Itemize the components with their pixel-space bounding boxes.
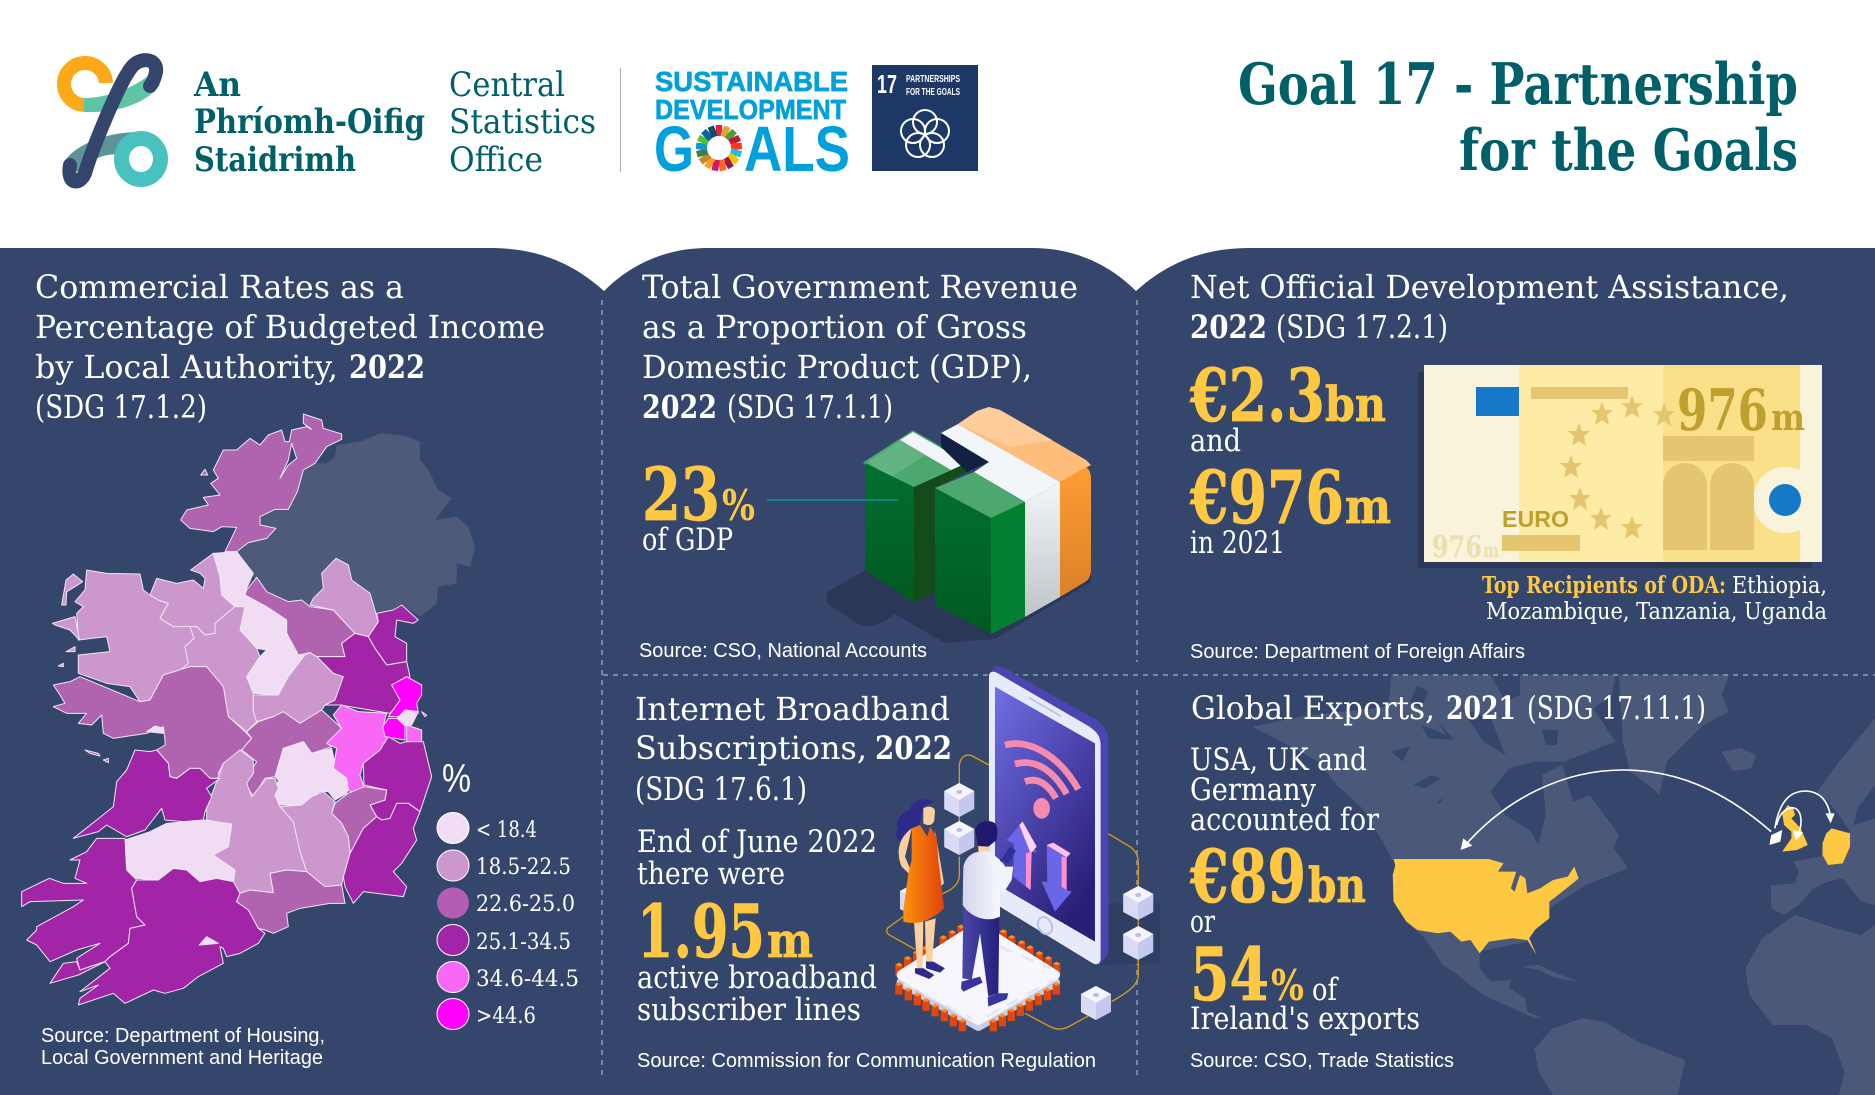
- panel: commercial rates heading: 2022: [349, 348, 425, 386]
- Northern Ireland: [237, 433, 475, 617]
- SDG wordmark: ALS: [744, 113, 850, 185]
- exports stats: bn: [1308, 858, 1366, 914]
- icon: euro banknote: m: [1483, 538, 1499, 562]
- source: communication regulation: Source: Commission for Communication Regulation: [637, 1050, 1096, 1072]
- exports stats: or: [1190, 904, 1215, 940]
- legend item: 25.1-34.5: 25.1-34.5: [476, 930, 571, 955]
- panel: commercial rates heading: Commercial Rates as a: [35, 268, 404, 306]
- panel: government revenue heading: Total Government Revenue: [642, 268, 1078, 306]
- SDG wordmark: G: [654, 113, 694, 185]
- exports stats: USA, UK and: [1190, 742, 1367, 778]
- Irish name of office: Staidrimh: [194, 140, 356, 180]
- panel: commercial rates heading: Percentage of Budgeted Income: [35, 308, 545, 346]
- woman figure: [896, 799, 945, 979]
- SDG wordmark: [654, 66, 850, 185]
- panel: development assistance heading: Net Official Development Assistance,: [1190, 268, 1789, 306]
- panel: global exports heading: (SDG 17.11.1): [1527, 689, 1706, 727]
- ODA stats: [1189, 353, 1391, 561]
- 23% of GDP stat: %: [722, 481, 755, 530]
- panel: broadband heading: 2022: [875, 729, 952, 767]
- exports stats: [1189, 742, 1420, 1037]
- English name of office: Office: [449, 140, 543, 180]
- legend item: above 44.6: [437, 998, 536, 1030]
- exports stats: Germany: [1190, 772, 1316, 808]
- SDG wordmark: DEVELOPMENT: [655, 94, 846, 125]
- broadband stat: [637, 824, 877, 1028]
- Irish name of office: Phríomh-Oifig: [194, 102, 425, 142]
- phone: [989, 666, 1108, 965]
- cube nodes: [900, 783, 1153, 1020]
- panel: government revenue heading: 2022: [642, 388, 717, 426]
- broadband stat: subscriber lines: [637, 992, 861, 1028]
- export destinations map: [1393, 770, 1850, 955]
- Irish name of office: An: [193, 65, 241, 105]
- panel background: [0, 248, 1875, 1095]
- data arrows: [1007, 822, 1072, 912]
- panel: global exports heading: Global Exports,: [1191, 689, 1435, 727]
- source: national accounts: Source: CSO, National Accounts: [639, 640, 927, 662]
- broadband stat: active broadband: [637, 960, 877, 996]
- panel: commercial rates heading: [35, 268, 545, 426]
- English name of office: Statistics: [449, 102, 596, 142]
- UK: [1782, 805, 1808, 852]
- panel: development assistance heading: (SDG 17.2.1): [1276, 308, 1448, 346]
- icon: euro banknote: EURO: [1502, 506, 1569, 532]
- Germany: [1823, 828, 1850, 865]
- SDG wordmark: SUSTAINABLE: [655, 66, 848, 97]
- top recipients note: Ethiopia,: [1732, 573, 1827, 599]
- USA: [1393, 859, 1579, 955]
- broadband stat: End of June 2022: [637, 824, 877, 860]
- panel: commercial rates heading: (SDG 17.1.2): [35, 388, 207, 426]
- soft shadow: [1100, 903, 1160, 965]
- SDG 17 icon: [872, 65, 978, 171]
- panel: development assistance heading: [1190, 268, 1789, 346]
- connector line: [767, 499, 898, 501]
- chip platform: [895, 925, 1060, 1031]
- icon: Irish flag 3D blocks: [826, 407, 1091, 643]
- source: housing: [41, 1025, 325, 1069]
- icon: euro banknote: 976: [1677, 377, 1768, 444]
- SDG 17 icon: PARTNERSHIPS: [906, 74, 960, 85]
- exports stats: of: [1312, 972, 1339, 1008]
- header background: [0, 0, 1875, 248]
- source: housing: Source: Department of Housing,: [41, 1025, 325, 1047]
- exports stats: %: [1271, 961, 1304, 1010]
- English name of office: [449, 65, 596, 180]
- 23% of GDP stat: of GDP: [642, 522, 733, 558]
- CSO logo: [64, 60, 160, 181]
- panel: development assistance heading: 2022: [1190, 308, 1267, 346]
- ODA stats: €976: [1189, 455, 1344, 541]
- main title: [1238, 51, 1798, 184]
- top recipients note: Top Recipients of ODA:: [1482, 572, 1726, 599]
- map legend: [437, 757, 579, 1030]
- 23% of GDP stat: 23: [642, 452, 720, 538]
- broadband stat: 1.95: [637, 889, 765, 975]
- exports stats: accounted for: [1190, 802, 1379, 838]
- ODA stats: €2.3: [1189, 353, 1325, 439]
- circuit wires: [887, 755, 1138, 1029]
- Ireland: [1769, 830, 1782, 845]
- panel: broadband heading: [635, 690, 952, 808]
- icon: euro banknote: 976: [1432, 530, 1482, 565]
- county regions: [22, 414, 432, 1005]
- world map background: [1253, 675, 1875, 1095]
- exports stats: 54: [1190, 932, 1269, 1018]
- man figure: [961, 821, 1016, 1007]
- wifi symbol: [1005, 744, 1078, 819]
- SDG 17 icon: 17: [877, 69, 897, 99]
- ODA stats: m: [1345, 479, 1391, 535]
- ODA stats: and: [1190, 423, 1241, 459]
- map legend: %: [442, 757, 471, 801]
- legend item: 18.5-22.5: 18.5-22.5: [476, 855, 571, 880]
- icon: euro banknote: m: [1771, 397, 1805, 439]
- source: trade statistics: Source: CSO, Trade Statistics: [1190, 1050, 1454, 1072]
- exports stats: €89: [1189, 834, 1306, 920]
- panel: government revenue heading: [642, 268, 1078, 426]
- broadband stat: there were: [637, 856, 785, 892]
- top recipients note: Mozambique, Tanzania, Uganda: [1486, 599, 1827, 625]
- legend item: 18.5-22.5: [437, 850, 571, 881]
- panel: government revenue heading: Domestic Product (GDP),: [642, 348, 1032, 386]
- icon: euro banknote: [1418, 365, 1822, 568]
- panel: global exports heading: [1191, 689, 1706, 727]
- top recipients note: [1482, 572, 1827, 625]
- illustration: smartphone, people and chip: [887, 666, 1160, 1031]
- legend item: 25.1-34.5: [437, 924, 571, 956]
- English name of office: Central: [449, 65, 565, 105]
- panel: broadband heading: Internet Broadband: [635, 690, 950, 728]
- panel: broadband heading: (SDG 17.6.1): [635, 770, 807, 808]
- exports stats: Ireland's exports: [1190, 1001, 1420, 1037]
- legend item: 22.6-25.0: 22.6-25.0: [476, 892, 575, 917]
- source: foreign affairs: Source: Department of Foreign Affairs: [1190, 641, 1525, 663]
- legend item: 34.6-44.5: [437, 962, 579, 992]
- Ireland map: [22, 414, 475, 1005]
- panel: broadband heading: Subscriptions,: [635, 729, 867, 767]
- dashed panel dividers: [602, 300, 1875, 1075]
- Irish name of office: [193, 65, 425, 180]
- logo divider: [620, 68, 622, 172]
- SDG 17 icon: FOR THE GOALS: [906, 87, 960, 98]
- legend item: below 18.4: [437, 812, 537, 844]
- arrows: [1463, 770, 1831, 848]
- legend item: 34.6-44.5: 34.6-44.5: [476, 967, 579, 992]
- panel: global exports heading: 2021: [1446, 689, 1516, 727]
- main title: for the Goals: [1459, 117, 1798, 184]
- panel: government revenue heading: as a Proportion of Gross: [642, 308, 1027, 346]
- legend item: 22.6-25.0: [437, 888, 575, 918]
- panel: commercial rates heading: by Local Authority,: [35, 348, 338, 386]
- panel: government revenue heading: (SDG 17.1.1): [727, 388, 893, 426]
- broadband stat: m: [767, 913, 813, 969]
- legend item: below 18.4: < 18.4: [476, 818, 537, 843]
- legend item: above 44.6: >44.6: [476, 1004, 536, 1029]
- source: housing: Local Government and Heritage: [41, 1047, 323, 1069]
- ODA stats: bn: [1325, 377, 1386, 433]
- ODA stats: in 2021: [1190, 525, 1285, 561]
